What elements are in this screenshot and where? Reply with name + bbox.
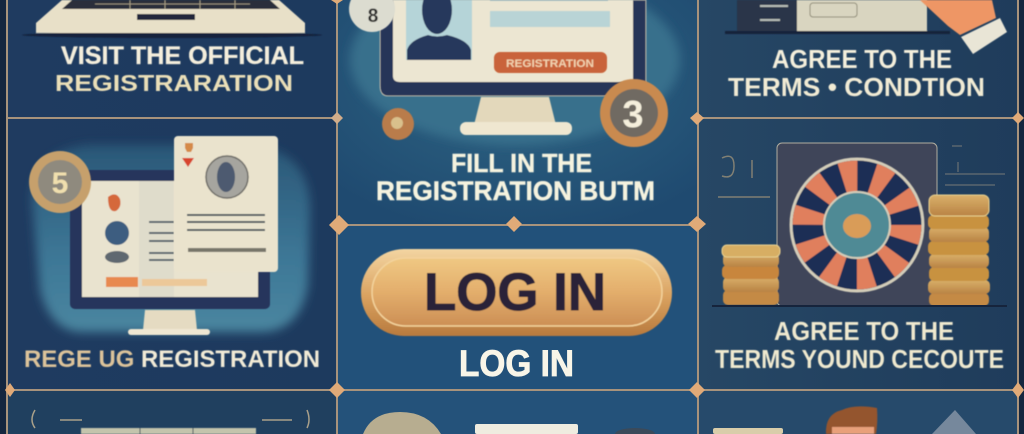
icon: person with hair bbox=[826, 406, 877, 434]
heading: agree to the: AGREE TO THE bbox=[772, 46, 952, 74]
heading: fill in the: FILL IN THE bbox=[451, 148, 592, 178]
icon: grey shield bbox=[932, 410, 976, 434]
caption: agree to the: AGREE TO THE bbox=[774, 318, 954, 346]
icon: dark ornament bbox=[615, 428, 655, 434]
icon: small coin bbox=[382, 108, 414, 140]
panel: agree to the terms and condition bbox=[698, 0, 1018, 118]
right ornament bbox=[945, 146, 1005, 185]
panel: wheel and coins bbox=[698, 118, 1018, 390]
icon: monitor bbox=[70, 170, 270, 335]
icon: right coin stack bbox=[928, 195, 990, 306]
panel: visit the official registration bbox=[8, 0, 337, 118]
icon: beige coin bbox=[363, 412, 441, 434]
icon: keyboard block bbox=[81, 428, 256, 434]
icon: roulette wheel bbox=[791, 159, 923, 291]
icon: number coin 5: 5 bbox=[52, 167, 68, 200]
icon: white card bbox=[475, 424, 578, 434]
log in button: LOG IN bbox=[424, 263, 606, 322]
shelf shadow bbox=[712, 305, 1007, 307]
panel: register monitor bbox=[8, 118, 337, 390]
icon: hand bbox=[920, 0, 1007, 54]
icon: number coin 5 bbox=[29, 151, 91, 213]
registration button: REGISTRATION bbox=[506, 58, 594, 70]
heading: visit the official: VISIT THE OFFICIAL bbox=[61, 42, 304, 70]
heading: registration butm: REGISTRATION BUTM bbox=[376, 176, 655, 206]
icon: number coin 3 bbox=[600, 79, 668, 147]
icon: pale coin: 8 bbox=[368, 6, 378, 27]
blue blob behind monitor bbox=[32, 145, 310, 332]
icon: pale coin bbox=[349, 0, 395, 32]
icon: device bbox=[725, 0, 950, 34]
icon: number coin 3: 3 bbox=[622, 94, 644, 136]
registration button bbox=[494, 52, 607, 73]
caption: log in: LOG IN bbox=[459, 343, 574, 384]
icon: laptop bbox=[22, 0, 322, 38]
panel: bottom strip bbox=[8, 391, 1018, 434]
icon: left coin stack bbox=[722, 245, 780, 305]
heading: registraration: REGISTRARATION bbox=[55, 70, 293, 96]
log in button bbox=[361, 249, 672, 336]
left ornament bbox=[718, 156, 770, 197]
panel: log in bbox=[338, 225, 697, 390]
icon: small ornaments left bbox=[32, 410, 309, 428]
icon: left cream tab bbox=[713, 428, 783, 434]
panel: fill in the registration bbox=[338, 0, 697, 225]
icon: document card bbox=[174, 136, 278, 272]
heading: terms condition: TERMS • CONDTION bbox=[728, 72, 985, 102]
caption: rege ug registration: REGE UG REGISTRATION bbox=[24, 346, 320, 373]
icon: desktop monitor bbox=[380, 0, 646, 135]
icon: wheel box bbox=[777, 143, 937, 306]
